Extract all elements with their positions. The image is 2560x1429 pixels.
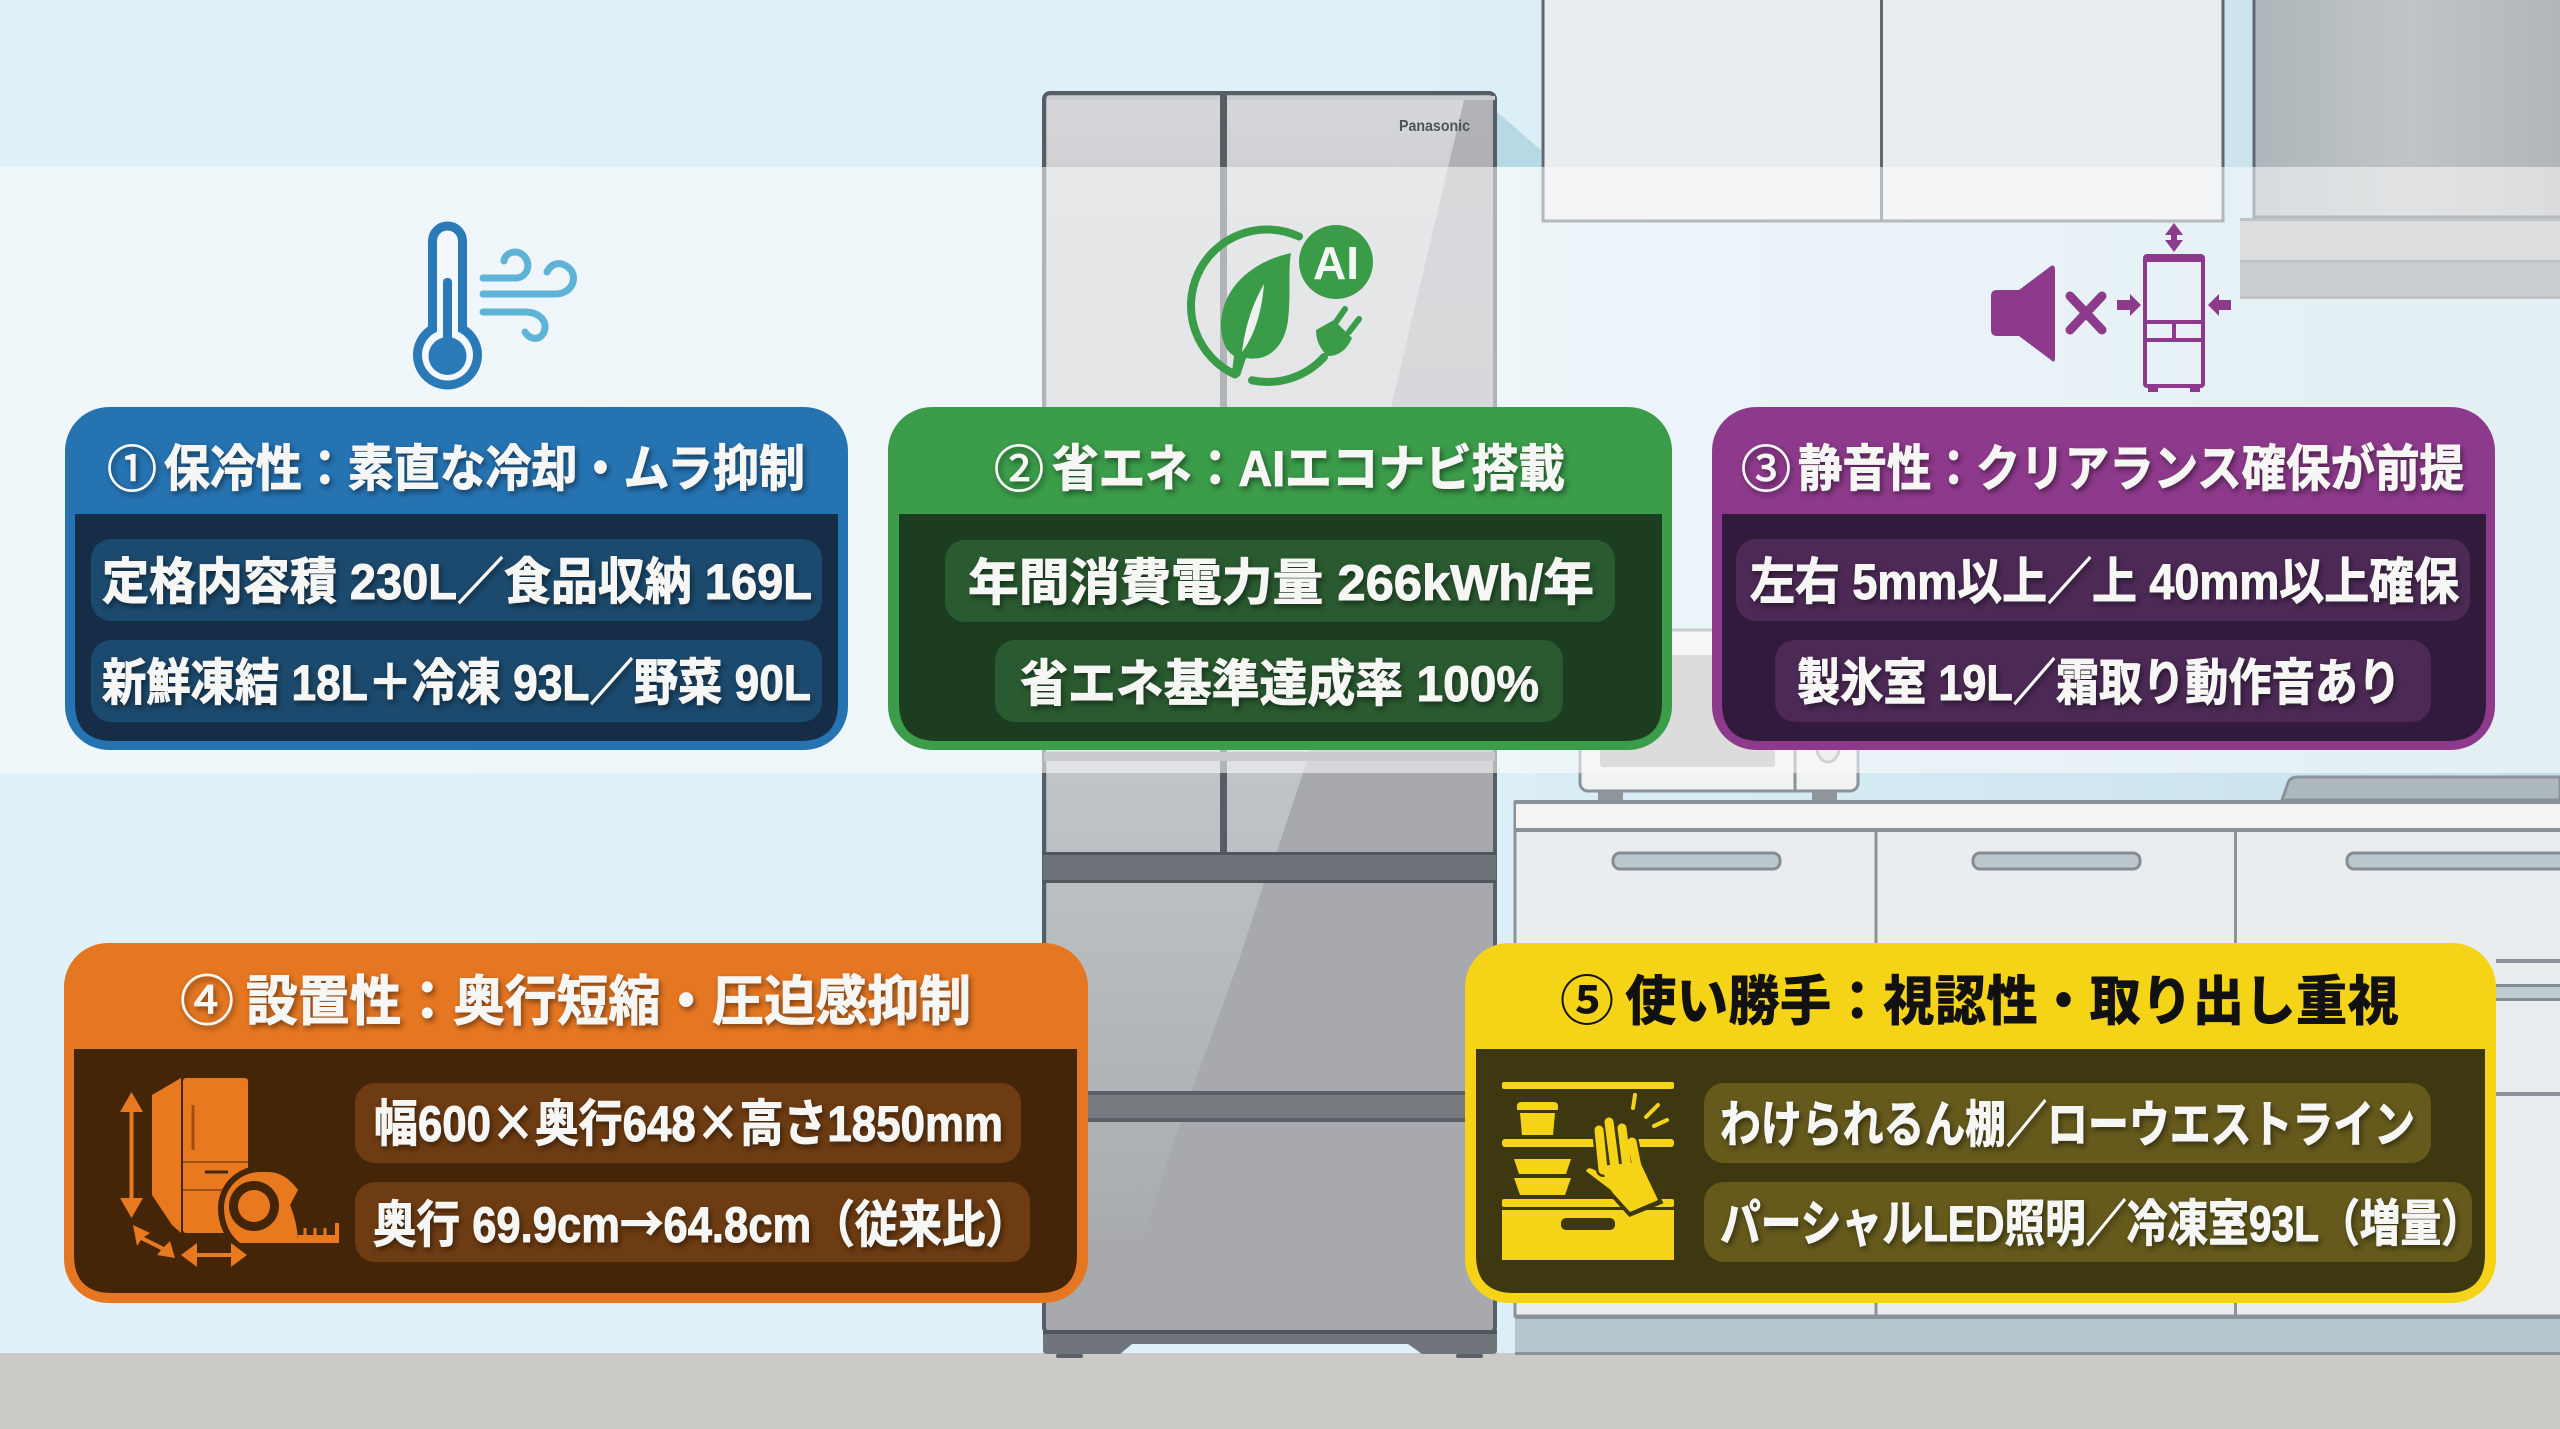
heading: 設置性：奥行短縮・圧迫感抑制 xyxy=(246,972,971,1032)
plinth xyxy=(1043,1330,1497,1354)
lower cabinets xyxy=(1515,800,2560,1355)
heading: 使い勝手：視認性・取り出し重視 xyxy=(1625,972,2399,1032)
row 1 xyxy=(91,539,822,621)
row 1: 年間消費電力量 266kWh/年 xyxy=(968,555,1594,611)
row 1 xyxy=(1736,539,2470,621)
panel 5: usability xyxy=(1465,943,2496,1303)
microwave xyxy=(1580,630,1858,801)
hand xyxy=(1583,1122,1660,1214)
height arrow xyxy=(120,1092,143,1218)
row 2 xyxy=(91,640,822,722)
heading: ② xyxy=(994,442,1044,498)
heading: 省エネ：AIエコナビ搭載 xyxy=(1052,441,1565,497)
translucent white band xyxy=(0,167,2560,773)
icon: AI eco leaf and plug: AI xyxy=(1313,237,1359,289)
icon: fridge and tape measure xyxy=(120,1078,339,1267)
row 1: わけられるん棚／ローウエストライン xyxy=(1720,1097,2415,1153)
row 2: 新鮮凍結 18L＋冷凍 93L／野菜 90L xyxy=(102,655,811,711)
row 1 xyxy=(945,540,1615,622)
row 2 xyxy=(1704,1182,2482,1262)
door light reflection xyxy=(1047,96,1465,1240)
row 2: 製氷室 19L／霜取り動作音あり xyxy=(1797,655,2401,711)
upper cabinets xyxy=(1543,0,2223,221)
panel 1: cooling xyxy=(65,407,848,750)
stove xyxy=(2282,777,2560,800)
row 1: 左右 5mm以上／上 40mm以上確保 xyxy=(1750,554,2459,610)
brand logo: Panasonic xyxy=(1399,118,1470,135)
heading: ④ xyxy=(180,972,234,1032)
panel 2: energy saving xyxy=(888,407,1672,750)
heading: ① xyxy=(107,442,157,498)
heading: 静音性：クリアランス確保が前提 xyxy=(1798,441,2464,497)
depth arrow xyxy=(133,1225,175,1258)
fridge body xyxy=(1044,93,1495,1333)
range hood xyxy=(2240,0,2560,299)
door seam xyxy=(1044,752,1495,761)
kitchen background xyxy=(1497,0,2560,1355)
width arrow xyxy=(181,1243,247,1267)
row 2 xyxy=(1775,640,2431,722)
panel 3: quietness xyxy=(1712,407,2495,750)
upper drawer band xyxy=(1043,852,1496,883)
icon: AI eco leaf and plug xyxy=(1191,225,1373,382)
refrigerator xyxy=(1043,93,1497,1358)
panel 4: installation xyxy=(64,943,1088,1303)
floor xyxy=(0,1353,2560,1429)
row 2: 省エネ基準達成率 100% xyxy=(1020,656,1539,712)
icon: thermometer and wind xyxy=(418,226,574,385)
icon: shelves and hand xyxy=(1502,1082,1674,1260)
heading: ⑤ xyxy=(1560,972,1614,1032)
row 1 xyxy=(1704,1083,2431,1163)
row 2: 奥行 69.9cm→64.8cm（従来比） xyxy=(373,1185,1029,1257)
row 1: 幅600×奥行648×高さ1850mm xyxy=(374,1084,1003,1156)
door centre seam xyxy=(1220,93,1227,852)
lower drawer band xyxy=(1043,1091,1496,1122)
icon: low noise and clearance xyxy=(1991,223,2231,392)
heading: 保冷性：素直な冷却・ムラ抑制 xyxy=(164,441,805,497)
row 1: 定格内容積 230L／食品収納 169L xyxy=(102,554,812,610)
fridge cast shadow xyxy=(1497,112,1541,167)
row 2 xyxy=(995,640,1563,722)
heading: ③ xyxy=(1741,442,1791,498)
